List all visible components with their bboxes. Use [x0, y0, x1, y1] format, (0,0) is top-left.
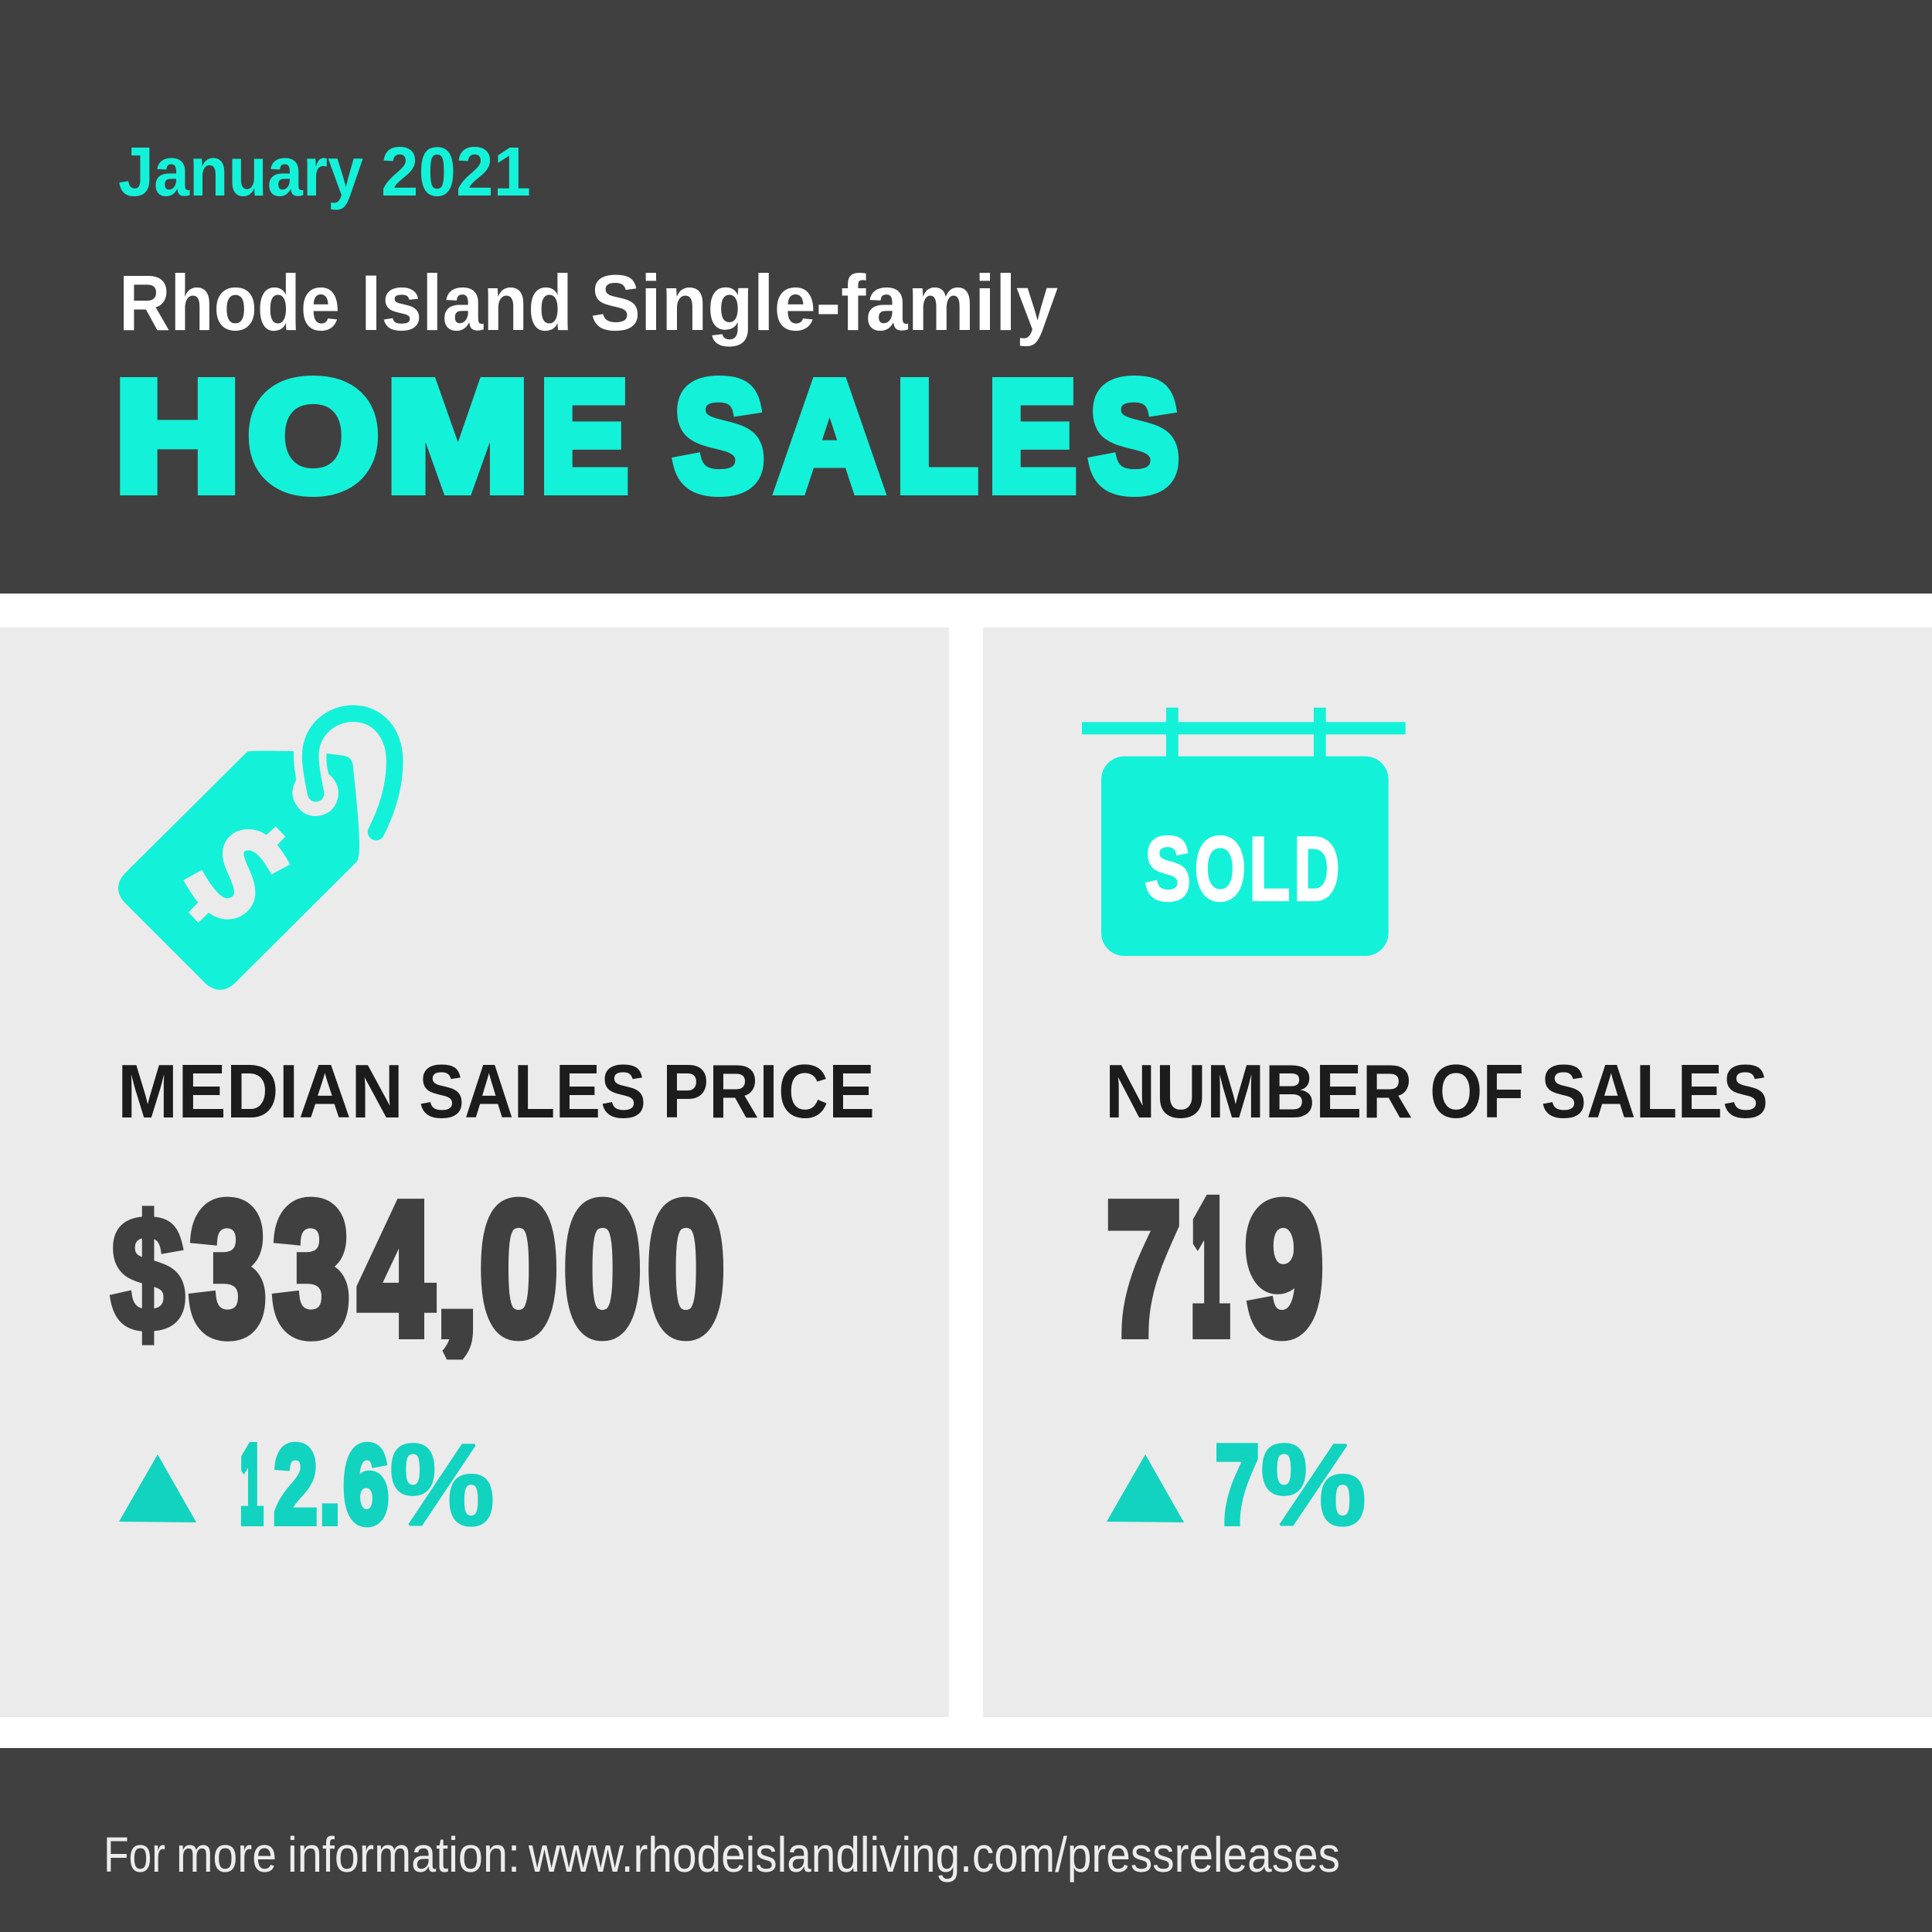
footer band	[0, 1748, 1932, 1932]
change: median price: 2	[274, 1422, 318, 1547]
icon: sold sign	[1082, 708, 1406, 956]
icon: sold sign: D	[1294, 818, 1340, 919]
main title: M	[386, 349, 529, 523]
main title: E	[539, 349, 628, 523]
change: number of sales: 7	[1215, 1422, 1259, 1547]
icon: sold sign: L	[1249, 818, 1290, 919]
heading: median sales price: SALES	[419, 1049, 646, 1134]
value: number of sales: 1	[1192, 1163, 1229, 1370]
icon: sold sign: O	[1195, 818, 1246, 919]
change: number of sales: %	[1260, 1420, 1366, 1549]
footer text: www.rhodeislandliving.com/pressreleases	[528, 1827, 1340, 1883]
main title: S	[674, 349, 764, 523]
date label: January	[118, 134, 363, 211]
heading: median sales price: PRICE	[662, 1049, 875, 1134]
main title: L	[896, 349, 978, 523]
icon: sold sign: S	[1145, 818, 1191, 919]
main title: A	[776, 349, 883, 523]
value: median price: ,	[437, 1216, 477, 1362]
heading: number of sales: OF	[1430, 1049, 1524, 1134]
value: number of sales: 9	[1245, 1163, 1324, 1374]
change: median price: 6	[343, 1422, 389, 1547]
main title: S	[1090, 349, 1179, 523]
icon: up triangle	[1107, 1454, 1184, 1522]
heading: number of sales: SALES	[1541, 1049, 1768, 1134]
icon: up triangle	[119, 1454, 196, 1522]
value: median price: 4	[359, 1163, 434, 1374]
heading: number of sales: NUMBER	[1105, 1049, 1413, 1134]
footer text: information:	[287, 1827, 520, 1883]
change: median price: 1	[240, 1423, 263, 1545]
main title: H	[114, 349, 241, 523]
icon: price tag	[118, 713, 395, 990]
change: median price: %	[389, 1420, 495, 1549]
header band	[0, 0, 1932, 594]
heading: median sales price: MEDIAN	[117, 1049, 403, 1134]
subtitle: Island	[361, 259, 573, 347]
value: median price: 3	[273, 1163, 350, 1374]
value: number of sales: 7	[1106, 1163, 1181, 1374]
subtitle: Rhode	[119, 259, 340, 347]
value: median price: 0	[563, 1163, 641, 1374]
main title: E	[988, 349, 1077, 523]
value: median price: $	[111, 1182, 185, 1365]
subtitle: Single-family	[590, 259, 1058, 347]
value: median price: 3	[189, 1163, 267, 1374]
value: median price: 0	[479, 1163, 558, 1374]
panel: number of sales	[983, 628, 1932, 1717]
date label: 2021	[381, 134, 531, 211]
footer text: more	[176, 1827, 277, 1883]
main title: O	[247, 349, 379, 523]
panel: median sales price	[0, 628, 949, 1717]
footer text: For	[104, 1827, 165, 1883]
value: median price: 0	[647, 1163, 725, 1374]
change: median price: .	[319, 1422, 341, 1547]
